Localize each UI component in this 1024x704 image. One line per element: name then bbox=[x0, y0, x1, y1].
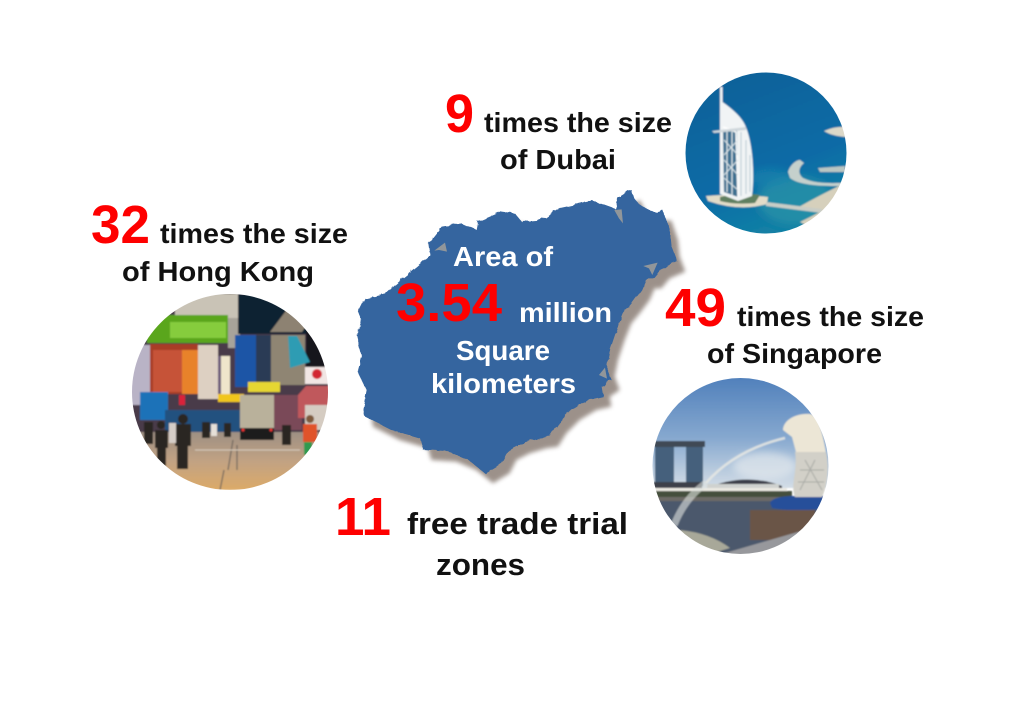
map shape bbox=[357, 190, 677, 473]
text: times the size of Singapore: times the size bbox=[737, 301, 924, 332]
map text: Square: Square bbox=[456, 335, 550, 366]
text: free trade trial zones: zones bbox=[436, 547, 525, 582]
text: times the size of Dubai bbox=[484, 107, 672, 175]
number: 11: 11 bbox=[335, 487, 391, 547]
number: 9: 9 bbox=[445, 84, 474, 144]
map shadow bbox=[365, 200, 685, 483]
map coastline bays bbox=[434, 209, 658, 379]
callout: Hong Kong bbox=[91, 195, 348, 287]
map text: million: million bbox=[519, 297, 612, 328]
text: times the size of Singapore: of Singapore bbox=[707, 338, 882, 369]
text: free trade trial zones bbox=[407, 506, 628, 582]
callout: free trade trial zones bbox=[335, 487, 628, 582]
map text: Area of: Area of bbox=[453, 241, 554, 272]
photo: Merlion and Marina Bay Sands, Singapore bbox=[650, 376, 832, 560]
photo: Burj Al Arab, Dubai bbox=[686, 72, 846, 234]
text: times the size of Hong Kong bbox=[122, 218, 348, 287]
callout: Singapore bbox=[665, 278, 924, 369]
photo: Hong Kong street bbox=[130, 290, 330, 490]
text: times the size of Hong Kong: times the size bbox=[160, 218, 348, 249]
map number: 3.54: 3.54 bbox=[396, 273, 502, 333]
text: times the size of Dubai: of Dubai bbox=[500, 144, 616, 175]
text: times the size of Hong Kong: of Hong Kong bbox=[122, 256, 314, 287]
number: 32: 32 bbox=[91, 195, 150, 255]
panel: Hainan island map bbox=[357, 190, 685, 483]
map text: kilometers: kilometers bbox=[431, 368, 576, 399]
text: free trade trial zones: free trade trial bbox=[407, 506, 628, 541]
callout: Dubai bbox=[445, 84, 672, 175]
text: times the size of Dubai: times the size bbox=[484, 107, 672, 138]
text: times the size of Singapore bbox=[707, 301, 924, 369]
number: 49: 49 bbox=[665, 278, 726, 338]
